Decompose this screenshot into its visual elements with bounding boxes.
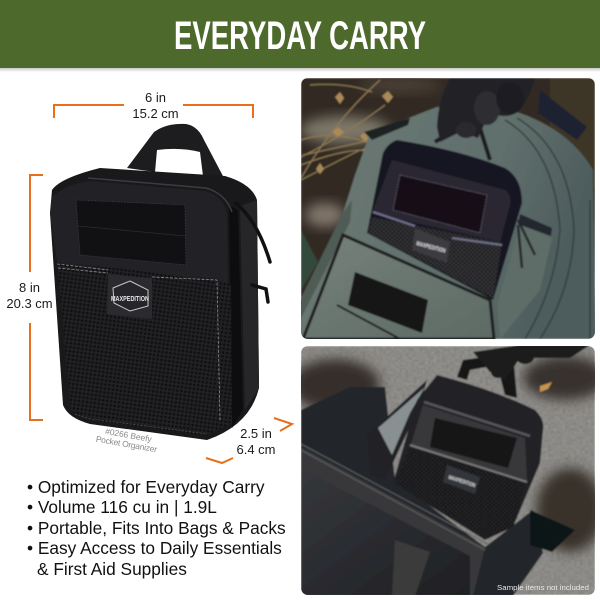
- top zipper stitching: [88, 178, 232, 212]
- dimension: width: [54, 90, 253, 121]
- dimension: depth: 6.4 cm: [236, 442, 276, 457]
- backpack seams: [505, 118, 590, 339]
- pouch handle: [127, 124, 224, 178]
- feature list: [27, 477, 286, 579]
- bag front strap: [392, 540, 430, 596]
- green leaves: [301, 230, 318, 290]
- mesh pocket: [57, 262, 232, 436]
- dried plants: [301, 80, 385, 180]
- sample items note: Sample items not included: [497, 583, 589, 592]
- title: EVERYDAY CARRY: [174, 14, 426, 58]
- range bag: [301, 387, 543, 596]
- glove: [437, 78, 535, 142]
- pouch mesh: [368, 217, 502, 298]
- dimension: width: 15.2 cm: [132, 106, 179, 121]
- bag side buckle: [530, 510, 575, 552]
- header banner: [0, 0, 600, 72]
- pouch patch: [412, 228, 450, 263]
- pouch handle: [435, 128, 490, 160]
- zipper pulls: [236, 203, 270, 302]
- side pocket: [497, 225, 552, 339]
- pouch mesh: [395, 447, 527, 538]
- lower velcro patch: [348, 272, 428, 333]
- dimension: height: 20.3 cm: [6, 296, 53, 311]
- pouch: [393, 353, 543, 540]
- dimension: depth: [206, 418, 292, 463]
- feature list: & First Aid Supplies: [37, 559, 187, 579]
- photo: pouch in range bag: [290, 345, 600, 596]
- maxpedition patch: MAXPEDITION: [111, 294, 149, 303]
- product caption: Pocket Organizer: [95, 434, 158, 454]
- velcro panel: [76, 200, 186, 265]
- backpack shoulder strap: [538, 90, 587, 140]
- upper front panel: [50, 181, 228, 283]
- product caption: #0266 Beefy: [105, 426, 153, 444]
- dimension: depth: 2.5 in: [240, 426, 272, 441]
- product photo: beefy pocket organizer: [50, 124, 270, 440]
- pouch patch: [443, 465, 480, 494]
- backpack strap top: [364, 118, 410, 140]
- pocket stitching: [57, 264, 220, 420]
- feature list: • Easy Access to Daily Essentials: [27, 538, 282, 558]
- bag lid band: [301, 447, 485, 596]
- pouch velcro: [393, 175, 487, 233]
- pouch body: [50, 168, 259, 440]
- lower front pocket: [303, 235, 494, 339]
- glove: [473, 345, 590, 380]
- pouch velcro: [430, 418, 517, 468]
- inner flap: [387, 380, 428, 463]
- pouch: [367, 128, 535, 300]
- photo: pouch in backpack: [300, 77, 596, 339]
- backpack: [300, 107, 596, 339]
- maxpedition patch: [107, 274, 152, 319]
- feature list: • Volume 116 cu in | 1.9L: [27, 497, 217, 517]
- feature list: • Optimized for Everyday Carry: [27, 477, 265, 497]
- dimension: width: 6 in: [145, 90, 166, 105]
- feature list: • Portable, Fits Into Bags & Packs: [27, 518, 286, 538]
- dimension: height: [6, 175, 53, 420]
- pouch cords: [518, 220, 535, 268]
- pouch: MAXPEDITION: [447, 475, 476, 489]
- dimension: height: 8 in: [19, 280, 40, 295]
- zipper side: [229, 205, 243, 428]
- outdoor background: [301, 78, 595, 298]
- gravel ground: [301, 346, 595, 595]
- pouch: MAXPEDITION: [415, 241, 446, 255]
- left shoulder strap: [300, 200, 352, 320]
